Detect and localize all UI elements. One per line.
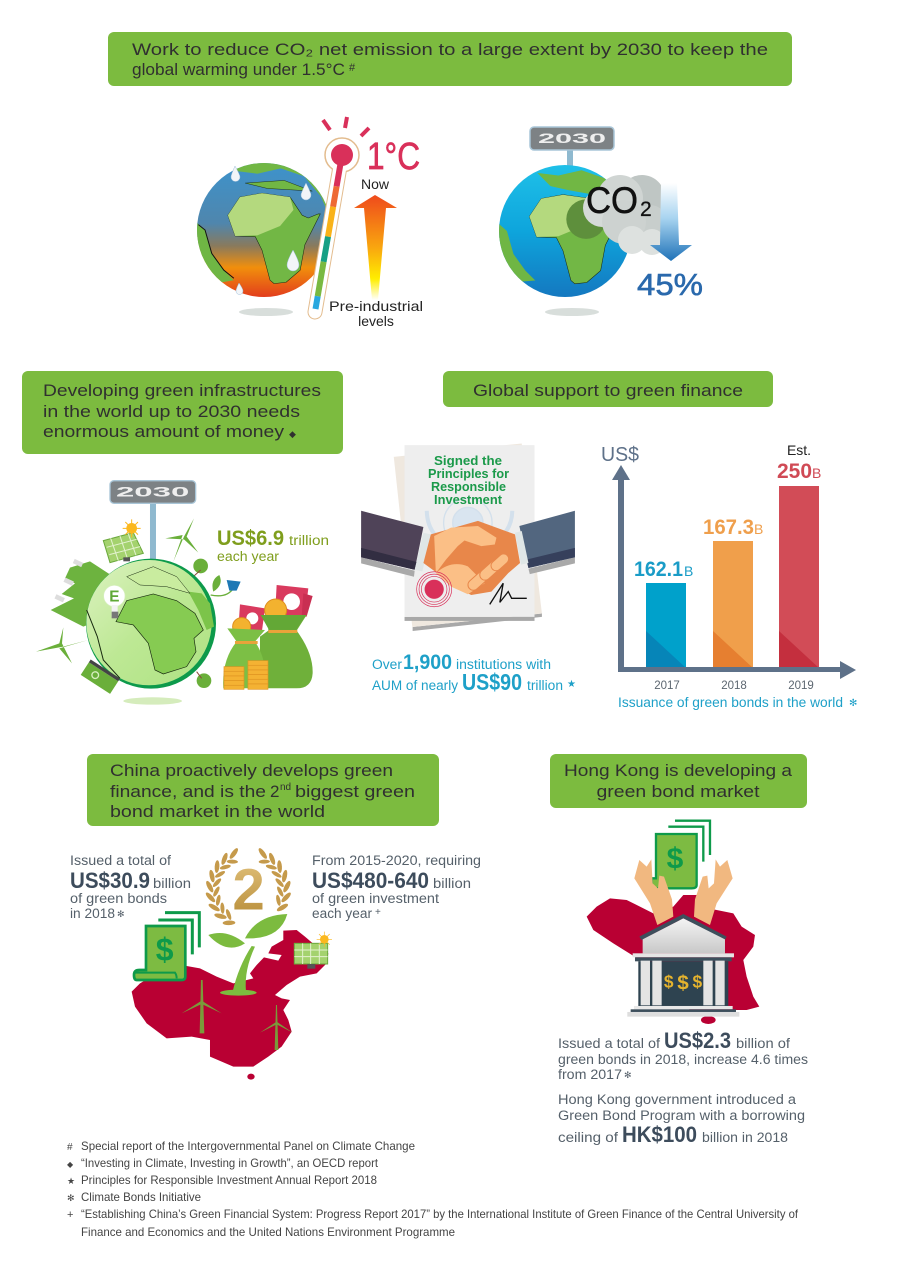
sign pole	[567, 150, 573, 166]
billion suffixes: B	[684, 563, 693, 579]
dollar signs: $	[664, 972, 674, 992]
text: institutions and AUM: Over	[372, 657, 403, 672]
footnotes: Climate Bonds Initiative	[81, 1190, 201, 1204]
text: institutions and AUM: institutions with	[456, 657, 551, 672]
left sleeve	[361, 511, 431, 577]
globe shadow	[545, 308, 599, 316]
light bulb: E	[109, 589, 119, 606]
footnotes: Principles for Responsible Investment Annual Report 2018	[81, 1173, 377, 1187]
CO2 label: CO	[586, 180, 638, 221]
Hong Kong map	[587, 895, 759, 1024]
text: China investment need: +	[375, 907, 381, 918]
ground shadow	[123, 697, 182, 705]
blue globe	[492, 165, 631, 297]
bank building	[627, 914, 739, 1017]
text: China issuance: in 2018	[70, 906, 115, 921]
text: institutions and AUM: US$90	[462, 669, 522, 695]
solar panel	[294, 943, 328, 969]
green bond: $	[156, 932, 174, 968]
chart footnote mark: ✻	[849, 698, 857, 709]
value labels: 162.1	[634, 558, 683, 581]
water drops	[231, 166, 311, 294]
document heading text: Responsible	[431, 479, 506, 494]
panel: green infrastructure heading: enormous amount of money	[43, 422, 285, 441]
right sleeve	[515, 511, 575, 574]
document heading text: Principles for	[428, 466, 509, 481]
footnotes: #	[67, 1142, 73, 1153]
footnotes: ★	[67, 1176, 75, 1186]
dollar signs	[664, 971, 702, 994]
bar 2017	[646, 583, 686, 668]
wind turbine left	[36, 627, 88, 663]
text: Hong Kong bond program: Hong Kong government introduced a	[558, 1092, 797, 1107]
banner: reduce CO2 emission	[108, 32, 792, 86]
value labels	[634, 460, 812, 581]
text: institutions and AUM: 1,900	[403, 651, 452, 674]
banner: reduce CO2 emission: Work to reduce CO₂ net emission to a large extent by 2030 to keep the	[132, 40, 768, 59]
text: US$6.9 trillion each year	[217, 527, 329, 564]
text: US$6.9 trillion each year: each year	[217, 549, 280, 564]
solar panel	[103, 533, 143, 563]
axis unit: US$	[601, 444, 639, 466]
green bond	[652, 821, 710, 888]
bar 2019	[779, 486, 819, 668]
text: China investment need: each year	[312, 906, 372, 921]
2030 sign: 2030	[538, 130, 606, 146]
footnotes: “Investing in Climate, Investing in Growth”, an OECD report	[81, 1156, 379, 1170]
panel: China heading: China proactively develops green	[110, 761, 393, 780]
panel: Hong Kong heading	[550, 754, 807, 808]
coin stacks	[224, 661, 268, 689]
illustration: China map with sprout	[132, 847, 332, 1080]
year labels: 2018	[721, 680, 747, 692]
axes	[612, 465, 856, 679]
text: Hong Kong bond program: ceiling of	[558, 1130, 618, 1145]
billion suffixes: B	[754, 521, 763, 537]
CO2 label: 2	[640, 198, 652, 221]
text: Hong Kong bond program: HK$100	[622, 1122, 697, 1147]
chart caption: Issuance of green bonds in the world	[618, 695, 843, 710]
text: Hong Kong bond program: Green Bond Program with a borrowing	[558, 1108, 805, 1123]
green bond	[134, 913, 199, 980]
text: Hong Kong bond program: billion in 2018	[702, 1130, 788, 1145]
text: Hong Kong issuance: billion of	[736, 1036, 790, 1051]
panel: Hong Kong heading: Hong Kong is developing a	[564, 761, 793, 780]
footnotes: ✻	[67, 1194, 75, 1204]
panel: green infrastructure heading: in the world up to 2030 needs	[43, 402, 300, 421]
text: Hong Kong issuance	[558, 1028, 808, 1082]
wind turbine top	[165, 518, 198, 562]
globe shadow	[239, 308, 293, 316]
pre-industrial label	[329, 298, 423, 329]
billion suffixes	[684, 465, 821, 579]
green bond: $	[667, 842, 684, 875]
red seal	[417, 572, 452, 607]
text: China investment need: US$480-640	[312, 868, 429, 893]
text: US$6.9 trillion each year: US$6.9	[217, 527, 284, 550]
text: China issuance	[70, 853, 191, 921]
factory	[51, 559, 113, 627]
signature	[490, 583, 527, 604]
panel: global support heading	[443, 371, 773, 407]
45 percent label: 45%	[637, 267, 703, 302]
text: China issuance: billion	[153, 876, 191, 891]
front document	[405, 445, 535, 621]
footnotes: Special report of the Intergovernmental Panel on Climate Change	[81, 1139, 415, 1153]
bar 2018	[713, 541, 753, 668]
panel: China heading: nd	[280, 782, 291, 793]
text: China investment need: billion	[433, 876, 471, 891]
panel: green infrastructure heading	[22, 371, 343, 454]
banner: reduce CO2 emission: #	[349, 62, 356, 74]
year labels	[654, 680, 814, 692]
document heading text: Investment	[434, 492, 503, 507]
text: Hong Kong issuance: from 2017	[558, 1067, 622, 1082]
rising arrow	[354, 195, 397, 300]
2030 sign	[110, 481, 196, 503]
text: institutions and AUM: AUM of nearly	[372, 678, 458, 693]
text: China issuance: of green bonds	[70, 891, 167, 906]
heat rays	[323, 117, 369, 136]
gold coins	[233, 599, 287, 636]
text: China investment need	[312, 853, 481, 921]
text: Hong Kong bond program	[558, 1092, 805, 1147]
text: Hong Kong issuance: Issued a total of	[558, 1036, 660, 1051]
panel: China heading: biggest green	[295, 782, 415, 801]
thermometer	[315, 138, 359, 312]
banner: reduce CO2 emission: global warming under 1.5°C	[132, 60, 345, 79]
footnotes: Finance and Economics and the United Nations Environment Programme	[81, 1225, 455, 1239]
2030 sign	[530, 127, 614, 150]
panel: Hong Kong heading: green bond market	[596, 782, 760, 801]
UN emblem	[427, 498, 512, 550]
estimate label: Est.	[787, 442, 811, 458]
money bags	[223, 615, 313, 688]
text: institutions and AUM	[372, 651, 576, 695]
text: China issuance: ✻	[117, 910, 125, 920]
recycling truck	[81, 659, 120, 694]
pre-industrial label: levels	[358, 313, 394, 329]
handshake hands	[423, 521, 520, 595]
2030 sign: 2030	[116, 484, 190, 500]
footnotes	[67, 1139, 799, 1239]
smoke cloud	[583, 175, 667, 255]
value labels: 250	[777, 460, 812, 483]
left hand	[634, 859, 673, 925]
downward arrow	[650, 183, 692, 261]
panel: China heading: 2	[270, 782, 279, 801]
sprout	[208, 914, 287, 996]
footnotes: ◆	[67, 1160, 74, 1169]
text: institutions and AUM: ★	[567, 679, 576, 690]
year labels: 2017	[654, 680, 680, 692]
year labels: 2019	[788, 680, 814, 692]
sun	[123, 519, 141, 537]
earth globe	[86, 559, 216, 689]
illustration: green earth with 2030 sign	[36, 481, 313, 705]
medal wreath	[204, 847, 292, 925]
icon: 2030 globe with CO2 cloud	[492, 127, 703, 316]
text: China issuance: US$30.9	[70, 868, 150, 893]
text: China investment need: of green investment	[312, 891, 439, 906]
1 degree label: 1°C	[367, 136, 420, 178]
text: China investment need: From 2015-2020, requiring	[312, 853, 481, 868]
text: US$6.9 trillion each year: trillion	[289, 533, 329, 548]
warming globe	[197, 163, 326, 297]
sun	[317, 932, 332, 947]
panel: green infrastructure heading: Developing green infrastructures	[43, 381, 321, 400]
pre-industrial label: Pre-industrial	[329, 298, 423, 314]
bar chart: green bond issuance	[601, 442, 857, 710]
red banknotes	[238, 585, 313, 633]
footnotes: +	[67, 1209, 73, 1221]
icon: warming globe with thermometer	[190, 117, 423, 329]
back paper	[394, 443, 542, 631]
document heading text: Signed the	[434, 453, 502, 468]
dollar signs: $	[677, 971, 689, 994]
plug	[211, 575, 241, 596]
illustration: Hong Kong bank	[587, 821, 759, 1024]
panel: China heading: bond market in the world	[110, 802, 325, 821]
panel: China heading: finance, and is the	[110, 782, 266, 801]
illustration: signed principles handshake	[361, 443, 575, 631]
text: Hong Kong issuance: ✻	[624, 1071, 632, 1081]
panel: China heading	[87, 754, 439, 826]
billion suffixes: B	[812, 465, 821, 481]
panel: global support heading: Global support to green finance	[473, 381, 743, 400]
number 2: 2	[232, 857, 265, 922]
sign pole	[150, 503, 156, 560]
light bulb	[104, 585, 125, 618]
document heading text	[428, 453, 509, 507]
now label: Now	[361, 176, 390, 192]
dollar signs: $	[692, 972, 702, 992]
wind turbines	[182, 980, 293, 1050]
value labels: 167.3	[703, 516, 754, 539]
text: China issuance: Issued a total of	[70, 853, 171, 868]
trees	[193, 559, 211, 688]
text: institutions and AUM: trillion	[527, 678, 563, 693]
China map	[132, 930, 328, 1080]
text: Hong Kong issuance: US$2.3	[664, 1028, 731, 1053]
panel: green infrastructure heading: ◆	[289, 429, 296, 439]
footnotes: “Establishing China’s Green Financial System: Progress Report 2017” by the International Institute of Green Finance of the Central University of	[81, 1207, 799, 1221]
right hand	[694, 859, 733, 925]
text: Hong Kong issuance: green bonds in 2018, increase 4.6 times	[558, 1052, 808, 1067]
